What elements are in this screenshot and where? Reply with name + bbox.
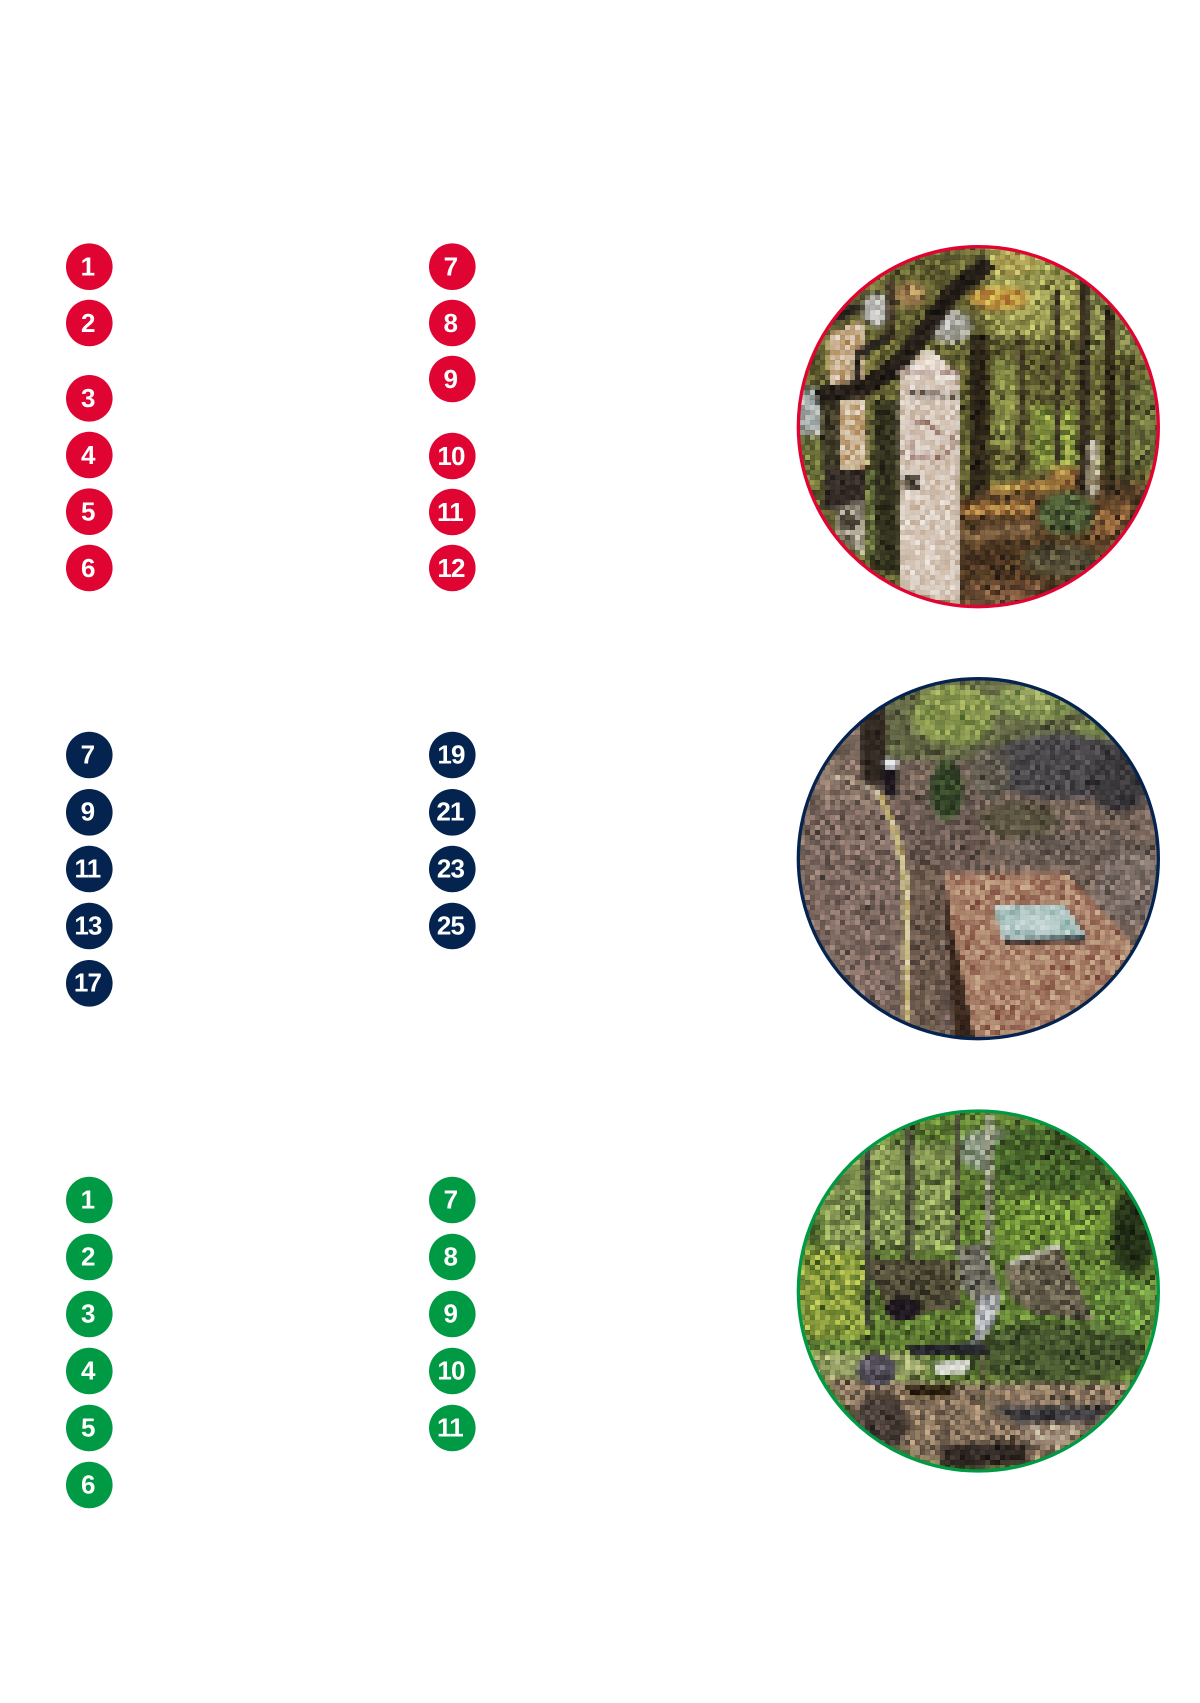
badge 3: 3 (81, 383, 95, 413)
panel: red numbered list (66, 243, 476, 591)
badge 5 (66, 1405, 113, 1451)
badge 2: 2 (81, 308, 95, 338)
badge 12: 12 (437, 553, 465, 583)
badge 9 (429, 356, 476, 402)
badge 13: 13 (74, 910, 102, 940)
badge 10: 10 (437, 441, 465, 471)
badge 3 (66, 1291, 113, 1337)
badge 4 (66, 1348, 113, 1394)
photo: wooden slab with metal plaque on leafy ground (796, 677, 1160, 1040)
badge 21: 21 (436, 796, 464, 826)
badge 17: 17 (74, 968, 101, 998)
badge 7 (66, 732, 113, 778)
panel: green numbered list (66, 1177, 476, 1508)
badge 7: 7 (81, 740, 95, 770)
badge 19: 19 (437, 740, 465, 770)
badge 2: 2 (81, 1242, 95, 1272)
badge 4: 4 (81, 1356, 96, 1386)
badge 9: 9 (443, 364, 457, 394)
badge 9 (66, 789, 113, 836)
big left tree (828, 320, 867, 468)
badge 12 (429, 545, 476, 591)
badge 21 (429, 789, 476, 836)
tail (905, 1342, 993, 1355)
right wing (1003, 1245, 1095, 1322)
badge 1 (66, 243, 113, 290)
badge 5: 5 (81, 1412, 95, 1442)
badge 6 (66, 1462, 113, 1508)
photo: metal bird sculpture in woodland (796, 1109, 1160, 1473)
photo: wooden marker post in autumn forest (796, 245, 1160, 608)
badge 5 (66, 488, 113, 535)
badge 10: 10 (437, 1356, 465, 1386)
badge 11 (429, 489, 476, 535)
badge 2 (66, 300, 113, 346)
forest floor (960, 465, 1148, 599)
badge 23: 23 (437, 854, 464, 884)
badge 10 (429, 1348, 476, 1394)
post (899, 348, 959, 607)
badge 11: 11 (437, 1412, 463, 1442)
badge 11: 11 (437, 497, 463, 527)
badge 9: 9 (81, 796, 95, 826)
badge 10 (429, 433, 476, 479)
badge 11: 11 (75, 854, 101, 884)
badge 7 (429, 243, 476, 290)
body (957, 1243, 1002, 1347)
badge 8 (429, 300, 476, 346)
badge 17 (66, 960, 113, 1007)
badge 3: 3 (81, 1298, 95, 1328)
badge 6: 6 (81, 553, 95, 583)
badge 7: 7 (444, 1184, 458, 1214)
badge 8: 8 (443, 1242, 457, 1272)
distant trunks (1017, 333, 1024, 477)
badge 25: 25 (437, 910, 464, 940)
badge 8 (429, 1234, 476, 1280)
badge 13 (66, 903, 113, 949)
badge 23 (429, 846, 476, 892)
badge 7 (429, 1177, 476, 1223)
badge 3 (66, 375, 113, 422)
dark branch (817, 262, 990, 397)
left wing (862, 1258, 962, 1323)
badge 4: 4 (81, 440, 96, 470)
badge 11 (429, 1405, 476, 1451)
badge 8: 8 (443, 308, 457, 338)
badge 6 (66, 545, 113, 591)
badge 5: 5 (81, 496, 95, 526)
badge 11 (66, 846, 113, 892)
badge 1: 1 (81, 252, 95, 282)
panel: navy numbered list (66, 732, 476, 1007)
rocks (823, 1377, 1133, 1470)
badge 1: 1 (81, 1184, 95, 1214)
badge 9: 9 (443, 1298, 457, 1328)
badge 19 (429, 732, 476, 778)
badge 6: 6 (81, 1470, 95, 1500)
badge 25 (429, 903, 476, 949)
badge 2 (66, 1234, 113, 1280)
badge 4 (66, 432, 113, 478)
badge 9 (429, 1291, 476, 1337)
badge 7: 7 (444, 252, 458, 282)
badge 1 (66, 1177, 113, 1223)
